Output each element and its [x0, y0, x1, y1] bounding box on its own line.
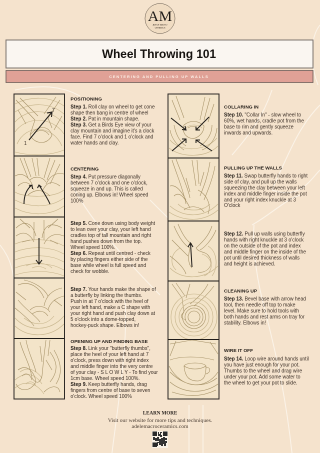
illustration: positioning: 7	[52, 108, 55, 114]
text: cleaning up: tool, then needle off top to make	[224, 302, 296, 308]
text: centering: squeeze in and up. This is called	[70, 186, 143, 192]
text: positioning: shape then bang in centre of wheel	[70, 110, 148, 116]
text: pulling up the walls	[224, 166, 308, 209]
text: positioning: Step 2. Pat in mountain shape.	[70, 116, 139, 122]
text: positioning: Step 1. Roll clay on wheel to get cone	[70, 104, 155, 110]
text: collaring in	[224, 104, 304, 136]
illustration: cone down	[15, 219, 64, 276]
text: positioning: POSITIONING	[70, 96, 102, 102]
text: step 7	[70, 287, 156, 329]
text: pulling up the walls: O'clock	[224, 203, 241, 209]
text: steps 5 and 6: to lean over your clay, your left hand	[70, 227, 151, 233]
text: pulling up the walls: side of clay, and pull up the walls	[224, 180, 297, 186]
text: pulling up the walls: index and middle finger inside the pot	[224, 192, 307, 198]
text: centering: CENTERING	[70, 166, 99, 172]
footer text	[108, 412, 213, 430]
text: cleaning up: level. Make sure to hold tools with	[224, 308, 299, 314]
text: collaring in: Step 10. "Collar In" - slow wheel to	[224, 112, 301, 118]
logo: AM	[148, 9, 172, 25]
text: step 7: Push in at 7 o'clock with the heel of	[70, 299, 149, 305]
logo: CERAMICS	[155, 26, 166, 30]
subtitle banner	[6, 70, 313, 82]
text: wire it off: under your pot. Add some water to	[224, 374, 301, 380]
text: centering: between 7 o'clock and one o'clock,	[70, 180, 147, 186]
text: step 7: your right hand and push clay down at	[70, 311, 156, 317]
text: step 12: and middle finger on the inside of the	[224, 250, 306, 256]
text: opening up and finding base: and middle finger into the very centre	[70, 364, 153, 370]
text: wire it off: you have just enough for your pot.	[224, 362, 300, 368]
text: step 7: your left hand, make a C shape with	[70, 305, 150, 311]
text: opening up and finding base: place the heel of your left hand at 7	[70, 352, 149, 358]
illustration: opening up	[15, 340, 60, 394]
text: positioning	[70, 96, 155, 146]
text: opening up and finding base: of your clay - S L O W L Y - To find your	[70, 370, 158, 376]
text: step 12	[224, 232, 306, 268]
text: pulling up the walls: and your right index knuckle at 3	[224, 198, 296, 204]
right illustration column	[168, 94, 219, 399]
logo	[145, 4, 175, 34]
text: positioning: Step 3. Get a Birds Eye view of your	[70, 122, 152, 128]
illustration: hockey puck	[15, 280, 64, 335]
illustration: collaring in	[169, 96, 218, 155]
text: opening up and finding base: Step 9. Keep butterfly hands, drag	[70, 382, 147, 388]
footer text: Visit our website for more tips and techniques.	[108, 417, 213, 424]
text: centering: 100%	[70, 198, 84, 204]
illustration: cleaning up	[171, 283, 217, 340]
logo: ADELE MACRO	[153, 24, 168, 26]
illustration: positioning	[15, 97, 64, 155]
text: cleaning up: Step 13. Bevel base with arrow head	[224, 296, 306, 302]
text: pulling up the walls: PULLING UP THE WALLS	[224, 166, 283, 172]
text: cleaning up	[224, 288, 306, 326]
text: steps 5 and 6	[70, 221, 156, 275]
text: step 12: hands with right knuckle at 3 o'clock	[224, 238, 304, 244]
text: cleaning up: both hands and rest arms on tray for	[224, 314, 305, 320]
text: opening up and finding base: Step 8. Link your "butterfly thumbs",	[70, 346, 150, 352]
text: opening up and finding base: OPENING UP AND FINDING BASE	[70, 339, 149, 345]
text: centering: coning up. Elbows in! Wheel speed	[70, 192, 149, 198]
text: steps 5 and 6: Step 5. Cone down using body weight	[70, 221, 156, 227]
text: positioning: clay mountain and imagine it's a clock	[70, 128, 155, 134]
text: opening up and finding base: fingers from centre of base to seven	[70, 388, 150, 394]
illustration: pulling walls	[169, 159, 218, 219]
text: wire it off: WIRE IT OFF	[224, 348, 253, 354]
text: pulling up the walls: squeezing the clay between your left	[224, 186, 305, 192]
footer text: adelemacroceramics.com	[132, 424, 189, 430]
text: wire it off: Step 14. Loop wire around hands until	[224, 356, 309, 362]
text: opening up and finding base: o'clock, press down with right index	[70, 358, 149, 364]
text: cleaning up: CLEANING UP	[224, 288, 258, 294]
text: step 7: Step 7. Your hands make the shape of	[70, 287, 156, 293]
text: centering: Step 4. Put pressure diagonally	[70, 174, 141, 180]
text: step 7: hockey-puck shape. Elbows in!	[70, 323, 139, 329]
illustration: centering	[15, 158, 64, 214]
text: positioning: water hands and clay.	[70, 140, 119, 146]
text: wire it off: Thumbs to the wheel and drag wire	[224, 368, 302, 374]
text: centering	[70, 166, 149, 204]
text: steps 5 and 6: base while wheel is full speed and	[70, 263, 146, 269]
text: pulling up the walls: Step 11. Swap butterfly hands to right	[224, 174, 308, 180]
text: step 12: on the outside of the pot and index	[224, 244, 301, 250]
text: opening up and finding base: 1cm base. Wheel speed 100%.	[70, 376, 140, 382]
footer text: LEARN MORE	[143, 412, 178, 416]
illustration: wire off	[169, 340, 218, 396]
text: opening up and finding base	[70, 339, 158, 400]
text: collaring in: 60%, wet hands, cradle pot from the	[224, 118, 304, 124]
text: steps 5 and 6: by placing fingers either side of the	[70, 257, 148, 263]
text: collaring in: base to rim and gently squeeze	[224, 124, 294, 130]
QR code	[152, 431, 168, 448]
text: step 7: 5 o'clock into a dome-topped,	[70, 317, 136, 323]
text: collaring in: COLLARING IN	[224, 104, 259, 110]
text: collaring in: inwards and upwards.	[224, 130, 273, 136]
text: step 12: Step 12. Pull up walls using butterfly	[224, 232, 305, 238]
text: wire it off	[224, 348, 309, 386]
text: step 12: pot until desired thickness of walls	[224, 256, 300, 262]
text: positioning: face. Find 7 o'clock and 1 o'clock and	[70, 134, 154, 140]
title banner	[6, 40, 313, 68]
text: steps 5 and 6: hand pushes down from the top.	[70, 239, 142, 245]
left illustration column	[14, 94, 64, 399]
text: step 7: a butterfly by linking the thumbs.	[70, 293, 142, 299]
text: cleaning up: stability. Elbows in!	[224, 320, 266, 326]
text: steps 5 and 6: Wheel speed 100%.	[70, 245, 115, 251]
text: steps 5 and 6: Step 6. Repeat until centred - check	[70, 251, 151, 257]
illustration: positioning: 1	[24, 141, 27, 147]
subtitle banner: CENTERING AND PULLING UP WALLS	[109, 75, 209, 79]
text: steps 5 and 6: check for wobble.	[70, 269, 109, 275]
text: wire it off: the wheel to get your pot to slide.	[224, 380, 297, 386]
text: opening up and finding base: o'clock. Wheel speed 100%	[70, 394, 132, 400]
title banner: Wheel Throwing 101	[102, 47, 216, 61]
text: step 12: and height is achieved.	[224, 262, 275, 268]
illustration: pull up	[170, 224, 218, 277]
text: steps 5 and 6: cradles top of tall mountain and right	[70, 233, 152, 239]
